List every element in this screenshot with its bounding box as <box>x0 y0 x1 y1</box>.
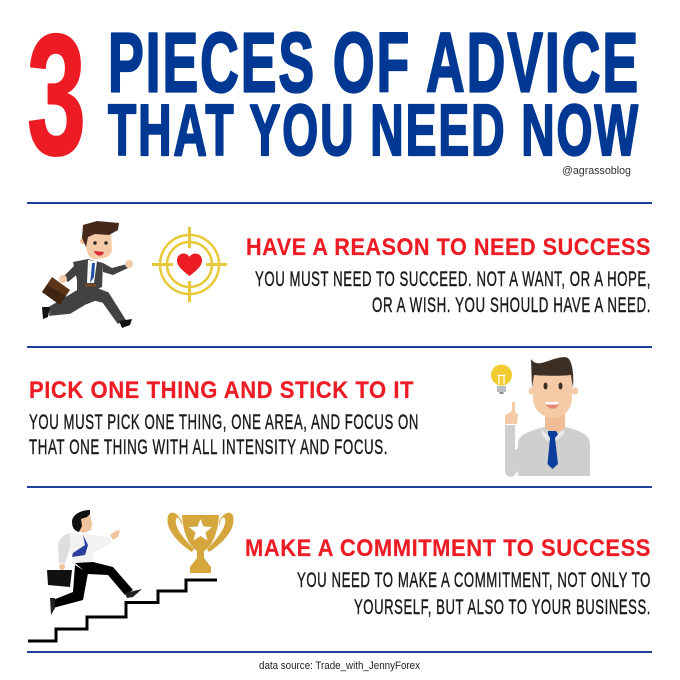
handle: @agrassoblog <box>562 165 631 177</box>
icon: stairs <box>28 580 217 641</box>
data source: data source: Trade_with_JennyForex <box>259 660 420 672</box>
panel: make a commitment <box>28 510 651 641</box>
body text: THAT ONE THING WITH ALL INTENSITY AND FOCUS. <box>29 436 388 459</box>
heading: MAKE A COMMITMENT TO SUCCESS <box>245 535 651 562</box>
numeral 3: 3 <box>27 0 86 191</box>
icon: man climbing stairs <box>47 510 142 615</box>
panel: have a reason <box>42 221 651 328</box>
heading: PICK ONE THING AND STICK TO IT <box>29 377 414 404</box>
title <box>27 0 640 191</box>
icon: trophy <box>167 513 234 573</box>
body text <box>29 411 419 459</box>
body text <box>297 569 651 619</box>
panel: pick one thing <box>29 357 590 477</box>
body text <box>255 268 651 317</box>
icon: businessman pointing up <box>505 357 590 477</box>
icon: light bulb <box>491 364 512 394</box>
icon: target with heart <box>152 227 227 302</box>
body text: YOU MUST PICK ONE THING, ONE AREA, AND FOCUS ON <box>29 411 419 434</box>
heart <box>177 253 202 276</box>
star <box>189 519 212 540</box>
icon: running businessman <box>42 221 133 328</box>
